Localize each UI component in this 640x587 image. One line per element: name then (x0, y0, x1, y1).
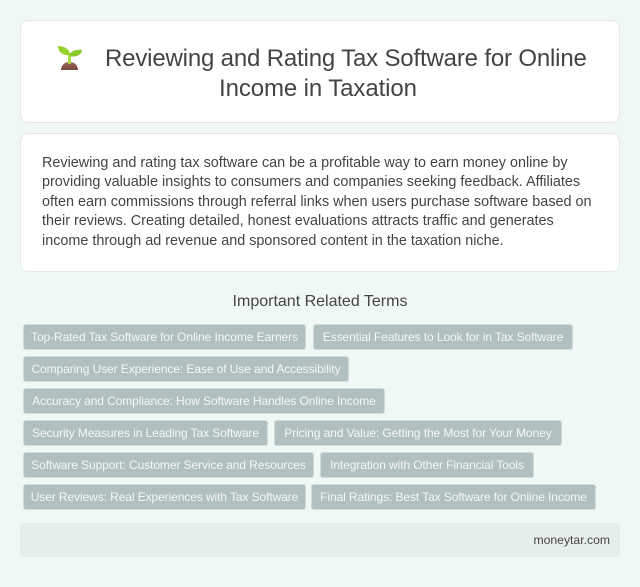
text block: intro paragraph: Reviewing and rating tax software can be a profitable way to earn money online by (42, 155, 568, 171)
heading: title: Reviewing and Rating Tax Software for Online (105, 45, 587, 72)
tag: User Reviews: Real Experiences with Tax Software (31, 490, 298, 504)
tag (313, 324, 573, 350)
text block: intro paragraph: income through ad revenue and sponsored content in the taxation niche. (42, 233, 504, 249)
panel: related term tags (23, 324, 596, 510)
tag (311, 484, 596, 510)
text: moneytar.com: moneytar.com (533, 533, 610, 547)
tag: Top-Rated Tax Software for Online Income Earners (31, 330, 298, 344)
heading: title (105, 45, 587, 102)
tag (23, 388, 385, 414)
panel: title card (20, 20, 620, 123)
tag: Accuracy and Compliance: How Software Handles Online Income (32, 394, 376, 408)
heading: important related terms: Important Related Terms (233, 293, 407, 310)
tag: Essential Features to Look for in Tax Software (323, 330, 563, 344)
tag: Security Measures in Leading Tax Software (32, 426, 259, 440)
tag (320, 452, 534, 478)
tag: Comparing User Experience: Ease of Use and Accessibility (31, 362, 341, 376)
panel: intro text card (20, 133, 620, 272)
tag (23, 452, 314, 478)
tag (274, 420, 562, 446)
tag (23, 420, 268, 446)
tag: Pricing and Value: Getting the Most for Your Money (284, 426, 552, 440)
footer: site name (20, 523, 620, 557)
tag (23, 356, 349, 382)
tag (23, 324, 306, 350)
tag: Final Ratings: Best Tax Software for Online Income (320, 490, 587, 504)
text block: intro paragraph: their reviews. Creating detailed, honest evaluations attracts traffic and generates (42, 213, 554, 229)
tag: Integration with Other Financial Tools (330, 458, 524, 472)
heading: title: Income in Taxation (219, 75, 417, 102)
tag: Software Support: Customer Service and Resources (31, 458, 306, 472)
text block: intro paragraph: often earn commissions through referral links when users purchase software based on (42, 194, 592, 210)
text block: intro paragraph (42, 155, 592, 249)
tag (23, 484, 306, 510)
text block: intro paragraph: providing valuable insights to consumers and companies seeking feedback. Affiliates (42, 174, 580, 190)
icon: seedling (58, 46, 82, 70)
